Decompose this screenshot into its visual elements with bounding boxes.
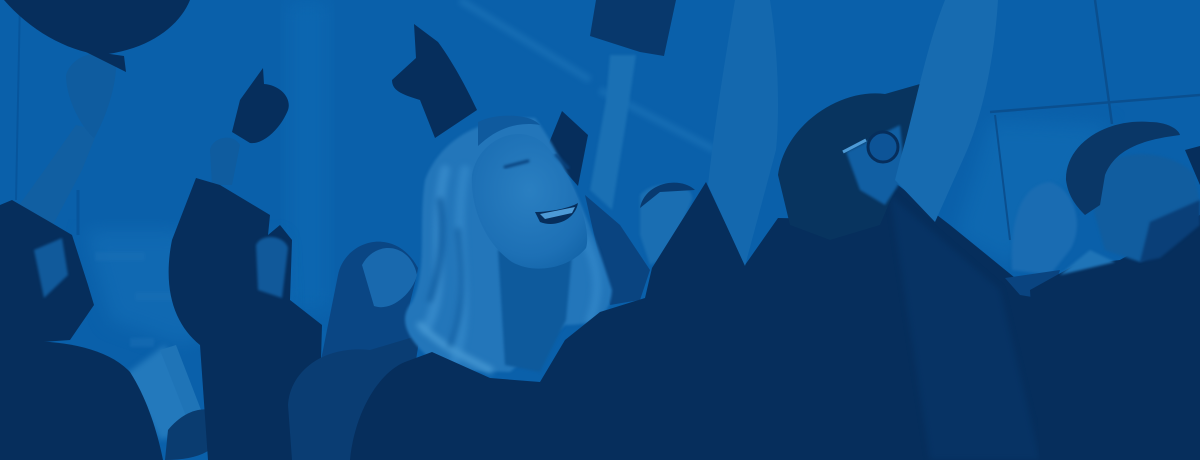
person: large dark gown foreground xyxy=(350,175,1200,460)
mortarboard cap: top centre xyxy=(590,0,676,56)
person: woman with glasses xyxy=(778,0,998,240)
person: blonde woman far right background xyxy=(1005,182,1077,300)
mortarboard cap: second xyxy=(232,68,289,143)
neck xyxy=(498,250,572,372)
mortarboard cap: centre xyxy=(392,24,477,138)
hair mass xyxy=(405,118,612,372)
mortarboard cap: top left xyxy=(4,0,190,72)
eyes xyxy=(505,155,568,168)
dark hair at crown xyxy=(478,116,540,146)
person: man on right xyxy=(1030,122,1200,460)
person: raised arm, centre-left graduate xyxy=(169,138,322,460)
person: main smiling woman xyxy=(405,116,612,372)
person: raised arm centre xyxy=(708,0,778,266)
face xyxy=(472,134,587,269)
person: background arm and figure xyxy=(585,55,695,305)
person: far left raising arm xyxy=(0,53,226,460)
person: woman with long hair xyxy=(288,242,420,460)
smile xyxy=(535,203,578,224)
hair strands xyxy=(420,170,597,370)
mortarboard cap: behind woman xyxy=(549,111,588,186)
